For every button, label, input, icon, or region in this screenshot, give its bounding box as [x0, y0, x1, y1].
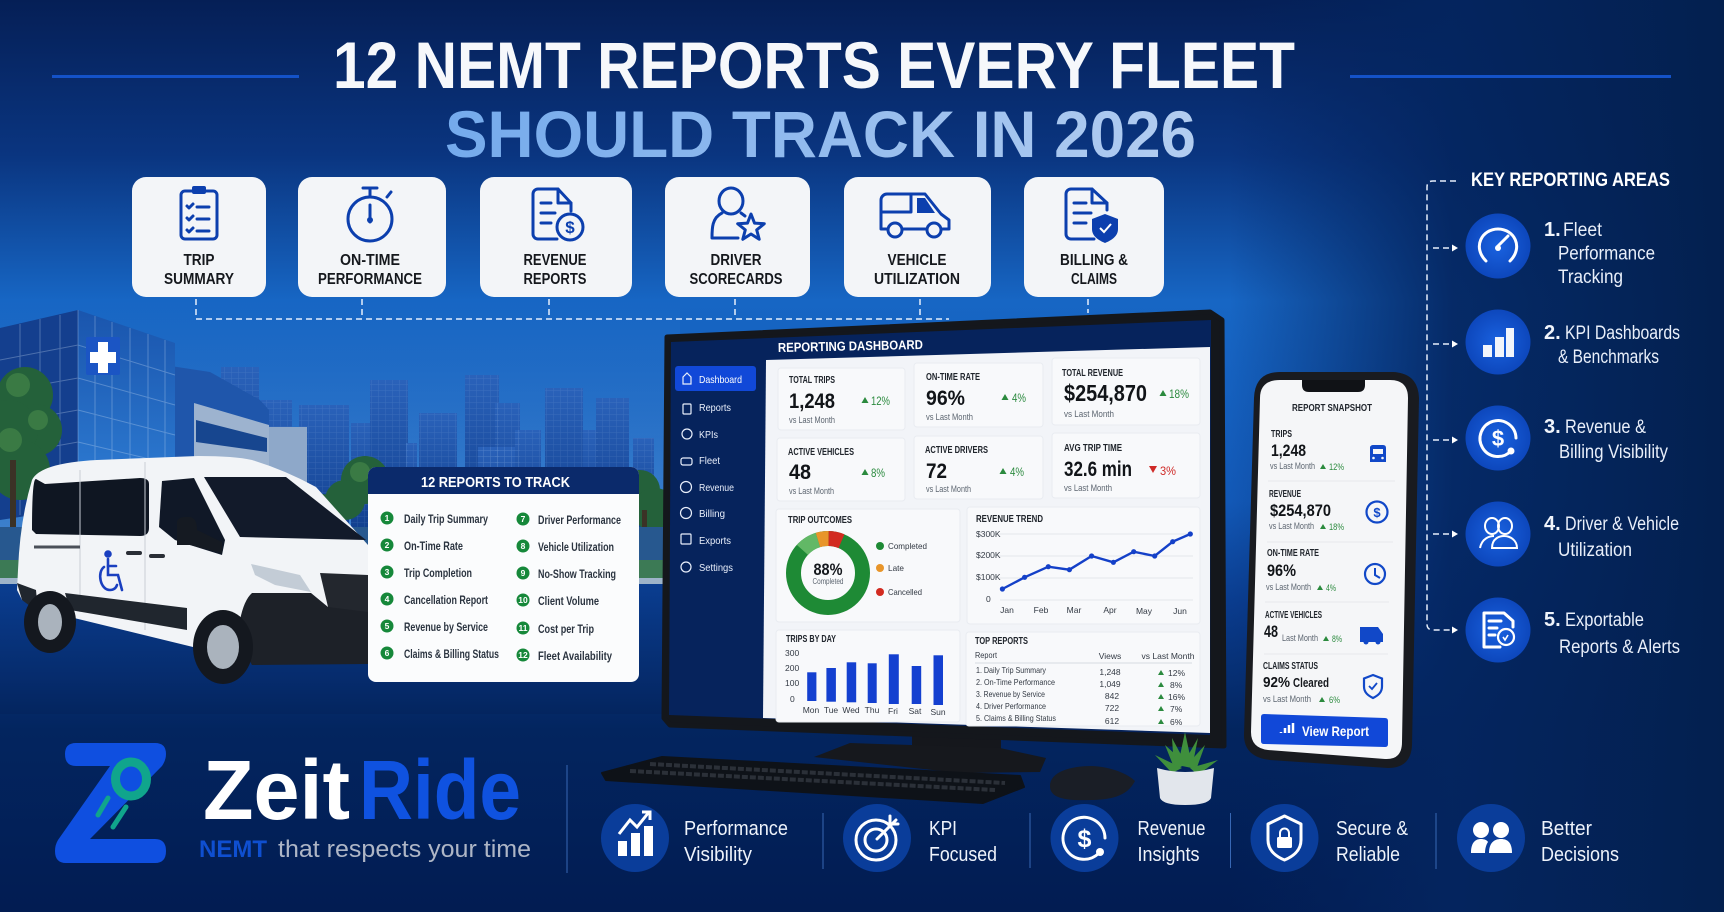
- report list left column: 6: [385, 648, 390, 658]
- card: vehicle utilization: VEHICLE: [888, 252, 946, 269]
- area 1: 1.: [1544, 219, 1561, 241]
- KPI card: active drivers: 72: [926, 460, 947, 483]
- plant: [1155, 732, 1218, 805]
- KPI card: total trips: [778, 368, 905, 430]
- sidebar navigation: Dashboard: [699, 374, 742, 386]
- table: top reports: 842: [1105, 691, 1119, 701]
- KPI card: on-time rate: ON-TIME RATE: [926, 372, 980, 383]
- donut chart: trip outcomes: Completed: [888, 541, 927, 551]
- card: revenue reports: REVENUE: [524, 252, 586, 269]
- KPI card: on-time rate: 96%: [926, 387, 965, 410]
- table: top reports: 3. Revenue by Service: [976, 689, 1045, 699]
- report list left column: [380, 512, 499, 661]
- report list left column: 2: [385, 540, 390, 550]
- trees: [0, 367, 677, 560]
- area 3: 3.: [1544, 416, 1561, 438]
- report list left column: 5: [385, 621, 390, 631]
- title: [52, 28, 1671, 171]
- panel: key reporting areas: [1427, 170, 1680, 662]
- sidebar navigation: Settings: [699, 562, 733, 574]
- table: top reports: 4. Driver Performance: [976, 701, 1046, 711]
- area 2: KPI Dashboards: [1565, 323, 1680, 344]
- area 5: Reports & Alerts: [1559, 637, 1680, 658]
- phone row: claims status: [1263, 661, 1382, 706]
- card: trip summary: TRIP: [184, 252, 214, 269]
- table: top reports: 612: [1105, 716, 1119, 726]
- card: revenue reports: REPORTS: [524, 271, 586, 288]
- area 5: [1466, 598, 1680, 662]
- KPI card: total trips: vs Last Month: [789, 415, 835, 426]
- report list right column: 10: [518, 595, 528, 605]
- title: 12 NEMT REPORTS EVERY FLEET: [333, 28, 1295, 102]
- sidebar navigation: Billing: [699, 508, 725, 520]
- phone row: on-time rate: 96%: [1267, 561, 1296, 580]
- line chart: revenue trend: $100K: [976, 572, 1001, 582]
- wheelchair van: [17, 456, 368, 684]
- area 3: $: [1492, 426, 1504, 451]
- KPI card: active vehicles: ACTIVE VEHICLES: [788, 447, 854, 458]
- table: top reports: Views: [1099, 651, 1121, 661]
- benefit: performance visibility: Visibility: [684, 844, 752, 866]
- KPI card: total trips: 12%: [871, 394, 890, 408]
- benefit: better decisions: [1457, 804, 1619, 872]
- KPI card: total revenue: vs Last Month: [1064, 409, 1114, 420]
- table: top reports: 1,248: [1099, 667, 1121, 677]
- area 4: Driver & Vehicle: [1565, 514, 1679, 535]
- area 1: Tracking: [1558, 267, 1623, 288]
- area 4: Utilization: [1558, 540, 1632, 561]
- desktop monitor: [664, 312, 1224, 773]
- phone row: active vehicles: 48: [1264, 622, 1278, 641]
- report list left column: Trip Completion: [404, 566, 472, 580]
- area 1: Fleet: [1563, 220, 1603, 241]
- benefit: revenue insights: [1050, 804, 1206, 872]
- sidebar navigation: Revenue: [699, 482, 734, 494]
- phone row: trips: 1,248: [1271, 441, 1306, 460]
- bar chart: trips by day: 200: [785, 663, 799, 673]
- report list right column: Cost per Trip: [538, 622, 594, 636]
- view report button: [1261, 714, 1388, 747]
- area 1: [1466, 214, 1655, 288]
- bar chart: trips by day: 300: [785, 648, 799, 658]
- bar chart: trips by day: 100: [785, 678, 799, 688]
- bar chart: trips by day: TRIPS BY DAY: [786, 634, 836, 645]
- phone row: revenue: REVENUE: [1269, 489, 1301, 500]
- KPI card: active drivers: vs Last Month: [926, 484, 971, 495]
- report list right column: 11: [518, 623, 528, 633]
- phone row: revenue: [1269, 489, 1388, 533]
- phone row: active vehicles: 8%: [1332, 634, 1342, 645]
- bar chart: trips by day: 0: [790, 694, 795, 704]
- bar chart: trips by day: [776, 630, 960, 722]
- benefit: better decisions: Better: [1541, 818, 1592, 840]
- report list right column: 8: [521, 541, 526, 551]
- low medical wing: [163, 365, 307, 487]
- logo: ZeitRide: that respects your time: [278, 836, 531, 863]
- card: driver scorecards: SCORECARDS: [690, 271, 782, 288]
- area 2: & Benchmarks: [1558, 347, 1659, 368]
- line chart: revenue trend: $300K: [976, 529, 1001, 539]
- sidebar navigation: [675, 366, 756, 574]
- area 3: Billing Visibility: [1559, 442, 1668, 463]
- sidebar navigation: Fleet: [699, 455, 720, 467]
- report list right column: Driver Performance: [538, 513, 621, 527]
- area 4: 4.: [1544, 513, 1561, 535]
- table: top reports: 2. On-Time Performance: [976, 677, 1055, 687]
- panel: 12 reports to track: [368, 467, 639, 682]
- phone row: on-time rate: 4%: [1326, 583, 1336, 594]
- area 5: 5.: [1544, 609, 1561, 631]
- KPI card: total revenue: TOTAL REVENUE: [1062, 368, 1123, 379]
- sidebar navigation: Reports: [699, 402, 731, 414]
- table: top reports: 722: [1105, 703, 1119, 713]
- KPI card: on-time rate: vs Last Month: [926, 412, 973, 423]
- hospital tower: [0, 310, 175, 520]
- connector dashes from report cards: [196, 299, 1088, 319]
- area 1: Performance: [1558, 244, 1655, 264]
- bar chart: trips by day: Mon: [803, 705, 820, 715]
- line chart: revenue trend: Mar: [1067, 605, 1081, 615]
- line chart: revenue trend: REVENUE TREND: [976, 514, 1043, 525]
- phone row: revenue: $254,870: [1270, 501, 1331, 520]
- benefit: secure and reliable: Secure &: [1336, 818, 1409, 840]
- card: billing and claims: BILLING &: [1060, 252, 1128, 269]
- bar chart: trips by day: Fri: [888, 706, 898, 716]
- monitor stand: [814, 730, 1046, 773]
- line chart: revenue trend: Feb: [1034, 605, 1049, 615]
- phone row: active vehicles: ACTIVE VEHICLES: [1265, 610, 1322, 621]
- KPI card: active vehicles: vs Last Month: [789, 486, 834, 497]
- title: SHOULD TRACK IN 2026: [445, 97, 1196, 171]
- logo: ZeitRide: NEMT: [199, 836, 267, 863]
- card: on-time performance: ON-TIME: [340, 252, 400, 269]
- KPI card: total trips: 1,248: [789, 390, 835, 413]
- smartphone: report snapshot: REPORT SNAPSHOT: [1292, 402, 1372, 414]
- phone row: revenue: 18%: [1329, 522, 1344, 533]
- line chart: revenue trend: Jun: [1173, 606, 1187, 616]
- report list right column: 12: [518, 650, 528, 660]
- KPI card: average trip time: 3%: [1160, 464, 1176, 478]
- area 3: Revenue &: [1565, 417, 1646, 438]
- view report button: View Report: [1302, 723, 1369, 739]
- phone row: on-time rate: vs Last Month: [1266, 582, 1311, 593]
- smartphone: report snapshot: [1244, 372, 1419, 768]
- card: driver scorecards: DRIVER: [710, 252, 762, 269]
- sidebar navigation: Exports: [699, 535, 731, 547]
- report list right column: No-Show Tracking: [538, 567, 616, 581]
- card: vehicle utilization: UTILIZATION: [874, 271, 960, 288]
- phone row: on-time rate: ON-TIME RATE: [1267, 548, 1319, 559]
- table: top reports: 7%: [1170, 704, 1183, 714]
- line chart: revenue trend: [967, 507, 1200, 624]
- donut chart: trip outcomes: TRIP OUTCOMES: [788, 515, 852, 526]
- report category cards: [132, 177, 1164, 297]
- card: vehicle utilization: [844, 177, 991, 297]
- benefit: better decisions: Decisions: [1541, 844, 1619, 866]
- table: top reports: 6%: [1170, 717, 1183, 727]
- dashboard heading: REPORTING DASHBOARD: [778, 337, 923, 355]
- report list left column: Daily Trip Summary: [404, 512, 488, 526]
- KPI card: active drivers: 4%: [1010, 465, 1024, 479]
- report list left column: 4: [385, 594, 390, 604]
- card: billing and claims: CLAIMS: [1071, 271, 1117, 288]
- KPI card: average trip time: 32.6 min: [1064, 458, 1132, 481]
- KPI card: average trip time: vs Last Month: [1064, 483, 1112, 494]
- table: top reports: Report: [975, 650, 998, 660]
- KPI card: active drivers: ACTIVE DRIVERS: [925, 445, 988, 456]
- bar chart: trips by day: Sat: [909, 706, 922, 716]
- table: top reports: 8%: [1170, 680, 1183, 690]
- report list left column: 1: [385, 513, 390, 523]
- report list right column: Client Volume: [538, 594, 599, 608]
- table: top reports: vs Last Month: [1142, 651, 1195, 661]
- phone row: revenue: vs Last Month: [1269, 521, 1314, 532]
- KPI card: on-time rate: [914, 363, 1043, 427]
- benefit: revenue insights: $: [1078, 825, 1092, 853]
- KPI card: total trips: TOTAL TRIPS: [789, 375, 835, 386]
- KPI card: average trip time: AVG TRIP TIME: [1064, 443, 1122, 454]
- icon: wheelchair: [100, 552, 122, 590]
- KPI card: active vehicles: 48: [789, 461, 811, 484]
- area 2: [1466, 310, 1680, 374]
- card: trip summary: SUMMARY: [164, 271, 235, 288]
- bottom benefits strip: [567, 765, 1619, 873]
- phone row: active vehicles: Last Month: [1282, 633, 1318, 644]
- report list right column: Fleet Availability: [538, 649, 612, 663]
- KPI card: active drivers: [914, 436, 1043, 499]
- logo: ZeitRide: Zeit: [203, 743, 350, 837]
- phone row: claims status: 6%: [1329, 695, 1340, 706]
- card: on-time performance: [298, 177, 446, 297]
- logo: ZeitRide: Ride: [359, 743, 521, 837]
- card: revenue reports: $: [565, 218, 575, 237]
- report list left column: Revenue by Service: [404, 620, 488, 634]
- sidebar navigation: KPIs: [699, 429, 718, 441]
- report list right column: Vehicle Utilization: [538, 540, 614, 554]
- benefit: performance visibility: [601, 804, 788, 872]
- heading: KEY REPORTING AREAS: [1471, 170, 1670, 191]
- donut chart: trip outcomes: Late: [888, 563, 904, 573]
- phone row: claims status: vs Last Month: [1263, 694, 1311, 705]
- panel: 12 reports to track: 12 REPORTS TO TRACK: [421, 474, 570, 491]
- benefit: performance visibility: Performance: [684, 818, 788, 840]
- report list left column: 3: [385, 567, 390, 577]
- report list left column: On-Time Rate: [404, 539, 463, 553]
- KPI card: total revenue: $254,870: [1064, 380, 1147, 406]
- benefit: revenue insights: Revenue: [1138, 818, 1206, 840]
- benefit: KPI focused: Focused: [929, 844, 997, 866]
- donut chart: trip outcomes: Completed: [812, 577, 844, 586]
- donut chart: trip outcomes: 88%: [814, 560, 842, 579]
- card: on-time performance: PERFORMANCE: [318, 271, 422, 288]
- table: top reports: TOP REPORTS: [975, 636, 1028, 647]
- mouse: [1050, 766, 1135, 800]
- logo: ZeitRide: [55, 743, 531, 863]
- KPI card: total revenue: 18%: [1169, 387, 1189, 401]
- report list right column: 9: [521, 568, 526, 578]
- icon: hospital cross: [86, 337, 120, 375]
- benefit: KPI focused: [843, 804, 997, 872]
- KPI card: active vehicles: [777, 438, 905, 501]
- report list right column: [516, 512, 621, 663]
- area 3: [1466, 406, 1668, 470]
- table: top reports: 5. Claims & Billing Status: [976, 713, 1056, 723]
- phone row: trips: vs Last Month: [1270, 461, 1315, 472]
- bar chart: trips by day: Wed: [842, 705, 860, 715]
- table: top reports: 1,049: [1099, 679, 1121, 689]
- report list left column: Cancellation Report: [404, 593, 488, 607]
- phone row: trips: 12%: [1329, 462, 1344, 473]
- donut chart: trip outcomes: Cancelled: [888, 587, 922, 597]
- KPI card: total revenue: [1052, 358, 1200, 425]
- card: driver scorecards: [665, 177, 810, 297]
- keyboard: [602, 757, 1024, 803]
- area 2: 2.: [1544, 322, 1561, 344]
- phone row: claims status: Cleared: [1293, 676, 1329, 690]
- phone row: trips: [1270, 429, 1386, 473]
- city skyline with hospital: [0, 300, 680, 714]
- phone row: claims status: CLAIMS STATUS: [1263, 661, 1318, 672]
- area 5: Exportable: [1565, 610, 1644, 631]
- line chart: revenue trend: 0: [986, 594, 991, 604]
- card: billing and claims: [1024, 177, 1164, 297]
- phone row: claims status: 92%: [1263, 674, 1290, 691]
- benefit: revenue insights: Insights: [1138, 844, 1200, 866]
- table: top reports: 16%: [1168, 692, 1185, 702]
- line chart: revenue trend: Jan: [1000, 605, 1014, 615]
- bar chart: trips by day: Tue: [824, 705, 838, 715]
- table: top reports: 1. Daily Trip Summary: [976, 665, 1047, 675]
- KPI card: on-time rate: 4%: [1012, 391, 1026, 405]
- line chart: revenue trend: Apr: [1103, 605, 1117, 615]
- phone row: revenue: $: [1373, 505, 1381, 520]
- phone row: on-time rate: [1266, 548, 1385, 594]
- bar chart: trips by day: Thu: [865, 705, 880, 715]
- phone row: trips: TRIPS: [1271, 429, 1292, 440]
- card: trip summary: [132, 177, 266, 297]
- KPI card: average trip time: [1052, 433, 1200, 498]
- table: top reports: 12%: [1168, 668, 1185, 678]
- line chart: revenue trend: $200K: [976, 550, 1001, 560]
- donut chart: trip outcomes: [776, 509, 960, 622]
- benefit: KPI focused: KPI: [929, 818, 957, 840]
- line chart: revenue trend: May: [1136, 606, 1153, 616]
- benefit: secure and reliable: Reliable: [1336, 844, 1400, 866]
- card: revenue reports: [480, 177, 632, 297]
- report list right column: 7: [521, 514, 526, 524]
- dashed bracket with arrows: [1427, 181, 1458, 634]
- icon: Z mark: [55, 743, 166, 863]
- benefit: secure and reliable: [1250, 804, 1409, 872]
- bar chart: trips by day: Sun: [930, 707, 946, 717]
- area 4: [1466, 502, 1679, 566]
- report list left column: Claims & Billing Status: [404, 647, 499, 661]
- table: top reports: [966, 632, 1200, 727]
- phone row: active vehicles: [1264, 610, 1383, 645]
- KPI card: active vehicles: 8%: [871, 466, 885, 480]
